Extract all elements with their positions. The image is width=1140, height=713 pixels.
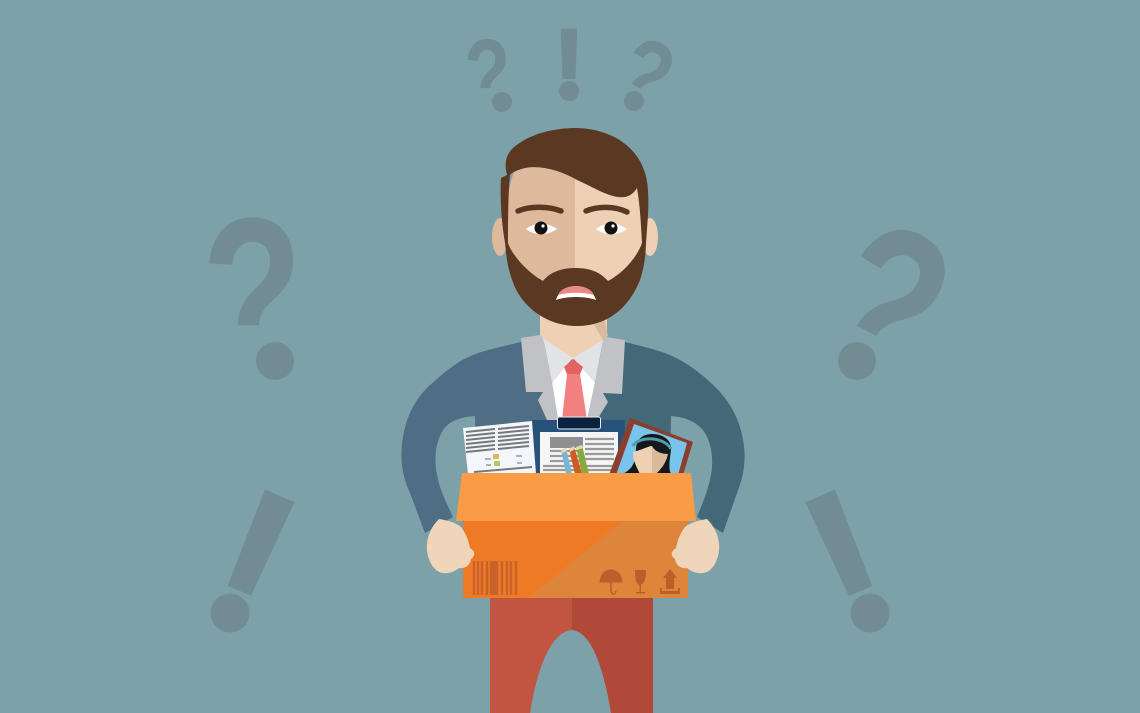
right eye (596, 222, 627, 234)
head (492, 128, 658, 326)
box front (463, 519, 688, 598)
face (506, 160, 575, 322)
tie (562, 359, 587, 420)
paper header block (550, 437, 583, 448)
left eye (526, 222, 557, 234)
punctuation marks (209, 28, 945, 678)
paper lines (543, 439, 614, 470)
small left question mark: ? (464, 18, 510, 130)
barcode (474, 561, 516, 595)
lapels (521, 335, 625, 420)
shirt (543, 338, 603, 420)
clipboard (532, 417, 625, 474)
icon: umbrella (600, 569, 622, 594)
icon: fragile glass (635, 570, 646, 594)
box lid (456, 473, 696, 521)
icon: this way up arrow (660, 569, 680, 594)
small exclamation mark (559, 28, 579, 101)
beard (505, 240, 646, 326)
large right question mark: ? (779, 170, 989, 441)
large left exclamation mark: ! (170, 438, 332, 689)
eyebrows (518, 207, 561, 211)
small left question mark (468, 39, 512, 112)
suit jacket (401, 340, 745, 533)
small exclamation mark: ! (550, 7, 588, 124)
left document (463, 421, 536, 474)
hair (501, 128, 648, 243)
pencils (561, 445, 589, 474)
large left question mark (209, 218, 294, 380)
cardboard box (456, 473, 696, 598)
large left exclamation mark (210, 490, 294, 632)
small right question mark: ? (596, 14, 692, 137)
left hand (427, 519, 474, 573)
large right question mark (838, 230, 945, 380)
colour tags (493, 454, 499, 459)
large right exclamation mark: ! (768, 438, 930, 689)
right hand (672, 519, 719, 573)
large left question mark: ? (202, 173, 302, 419)
box front shaded fold (528, 519, 688, 598)
ears (492, 218, 508, 256)
neck shadow (590, 312, 608, 340)
illustration: worried man carrying a box (209, 28, 945, 713)
clipboard paper (540, 432, 618, 474)
mouth (556, 286, 596, 300)
framed photo (609, 418, 693, 475)
small right question mark (624, 40, 672, 111)
large right exclamation mark (806, 490, 890, 632)
legs (490, 590, 653, 713)
neck (540, 310, 607, 360)
clip (558, 417, 600, 429)
barcode thick bar (491, 561, 498, 595)
woman portrait (622, 434, 671, 474)
